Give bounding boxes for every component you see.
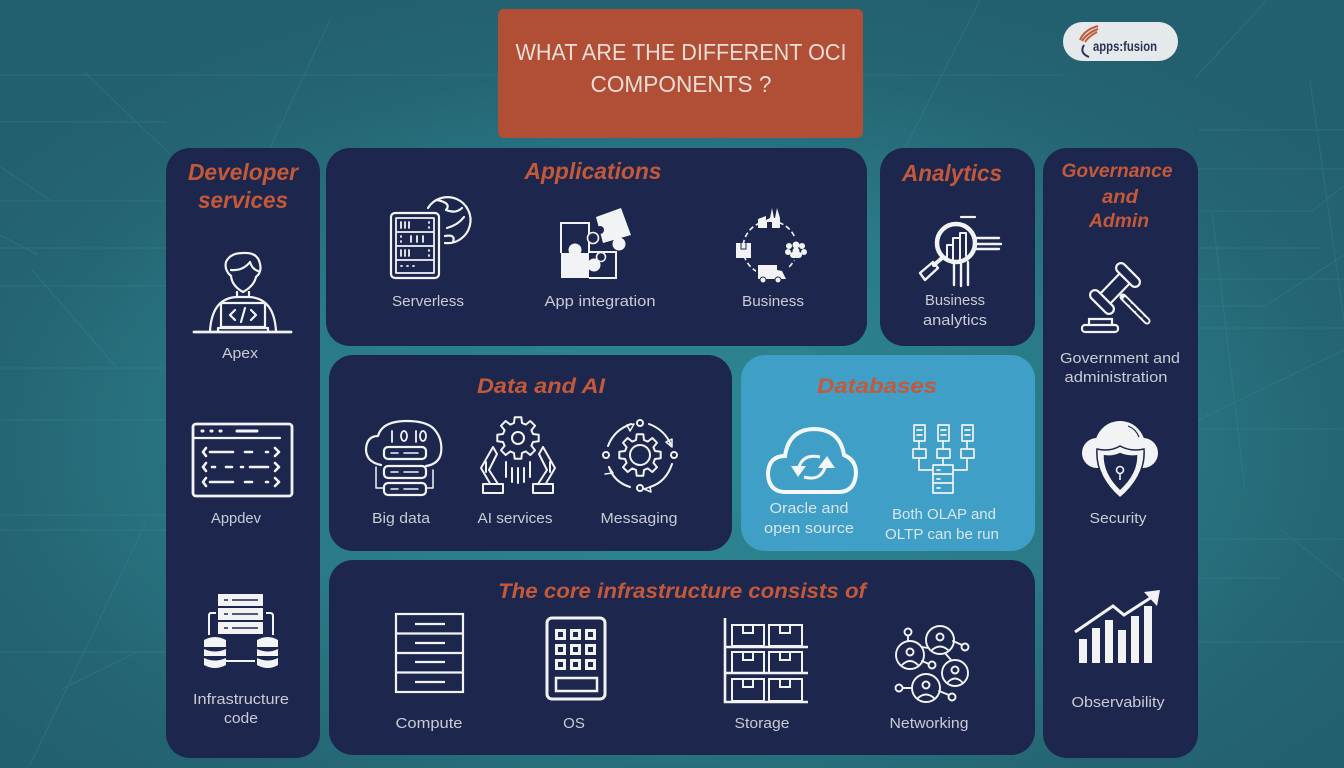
panel: governance and admin [1043, 148, 1198, 758]
label: business analytics [923, 292, 987, 329]
icon: gear in hands [481, 417, 555, 493]
heading: developer services: services [198, 187, 288, 213]
label: both OLAP and OLTP can be run [885, 506, 999, 543]
heading: core infrastructure: The core infrastructure consists of [498, 580, 868, 603]
label: government and administration [1060, 350, 1180, 386]
panel: applications [326, 148, 867, 346]
label: government and administration: administration [1064, 369, 1168, 386]
label: messaging: Messaging [600, 510, 678, 527]
logo: apps fusion [1063, 22, 1178, 61]
label: AI services: AI services [478, 510, 552, 527]
title box: COMPONENTS ? [590, 71, 772, 97]
panel: data and AI [329, 355, 732, 551]
heading: governance and admin [1062, 161, 1173, 232]
icon: code window [193, 424, 292, 496]
panel: analytics [880, 148, 1035, 346]
label: business: Business [742, 293, 804, 310]
icon: developer at laptop [194, 253, 291, 332]
icon: people network [896, 626, 968, 702]
label: business analytics: Business [925, 292, 985, 309]
icon: gavel [1082, 268, 1147, 332]
label: OS: OS [563, 715, 585, 732]
title box [498, 9, 863, 138]
label: government and administration: Government and [1060, 350, 1180, 367]
label: storage: Storage [734, 715, 790, 732]
icon: messaging gear cycle [603, 420, 677, 492]
icon: big data server cloud [366, 421, 441, 495]
label: both OLAP and OLTP can be run: Both OLAP and [892, 506, 996, 523]
label: business analytics: analytics [923, 312, 987, 329]
heading: developer services [188, 159, 299, 213]
icon: OS keypad [547, 618, 605, 699]
icon: magnifier with chart [920, 217, 1001, 286]
panel: databases [741, 355, 1035, 551]
label: serverless: Serverless [392, 293, 464, 310]
label: observability: Observability [1072, 694, 1165, 711]
label: apex: Apex [222, 345, 259, 362]
icon: cloud security shield [1082, 421, 1158, 498]
icon: server and globe [391, 197, 471, 278]
label: compute: Compute [396, 715, 462, 732]
heading: applications: Applications [524, 158, 662, 184]
logo: apps fusion: apps:fusion [1093, 38, 1157, 54]
icon: compute rack [396, 614, 463, 692]
heading: data and AI: Data and AI [477, 375, 606, 398]
icon: servers and databases [204, 594, 278, 668]
icon: cloud sync [768, 429, 856, 492]
icon: business cycle [736, 208, 808, 284]
label: infrastructure code [193, 691, 289, 727]
heading: databases: Databases [817, 375, 937, 398]
label: security: Security [1090, 510, 1147, 527]
heading: governance and admin: Admin [1088, 211, 1149, 232]
panel: core infrastructure [329, 560, 1035, 755]
heading: governance and admin: Governance [1062, 161, 1173, 182]
panel: developer services [166, 148, 320, 758]
heading: analytics: Analytics [901, 160, 1002, 186]
title box: WHAT ARE THE DIFFERENT OCI [516, 39, 846, 65]
label: oracle and open source [764, 500, 854, 537]
label: infrastructure code: Infrastructure [193, 691, 289, 708]
label: appdev: Appdev [211, 510, 261, 527]
label: app integration: App integration [544, 293, 656, 310]
icon: database tree [913, 425, 974, 493]
label: both OLAP and OLTP can be run: OLTP can be run [885, 526, 999, 543]
label: networking: Networking [890, 715, 968, 732]
label: oracle and open source: Oracle and [770, 500, 848, 517]
heading: developer services: Developer [188, 159, 299, 185]
icon: puzzle pieces [561, 208, 631, 278]
heading: governance and admin: and [1102, 187, 1138, 208]
label: big data: Big data [372, 510, 431, 527]
icon: storage shelves [725, 618, 808, 702]
label: infrastructure code: code [224, 710, 258, 727]
icon: growth chart [1075, 590, 1160, 663]
label: oracle and open source: open source [764, 520, 854, 537]
